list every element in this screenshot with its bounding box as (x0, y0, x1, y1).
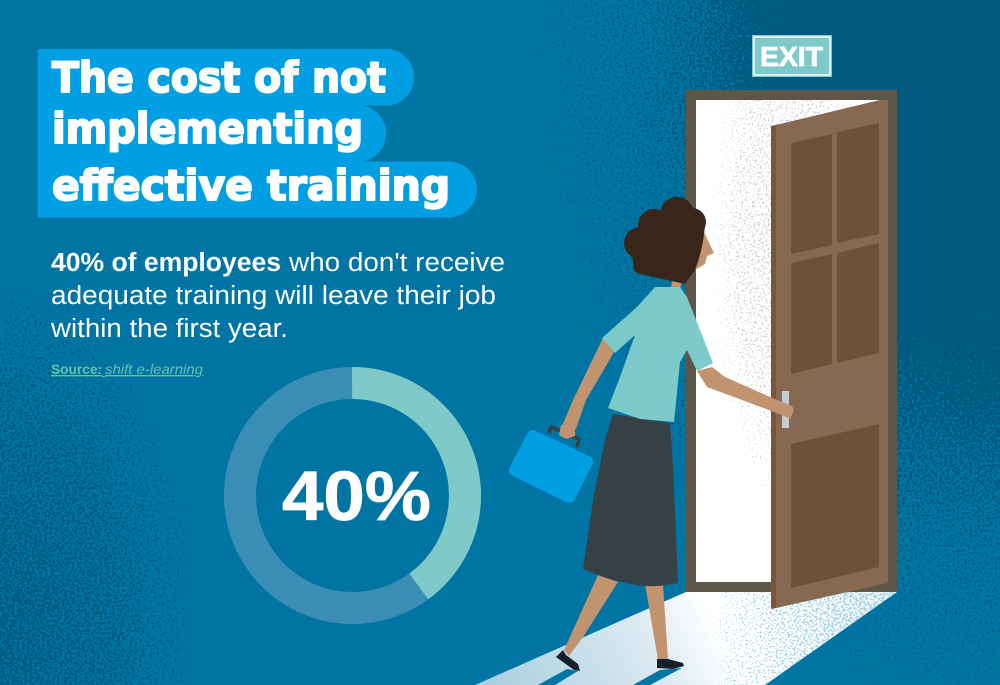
open door (771, 100, 888, 609)
source link: shift e-learning (105, 362, 204, 377)
source link: Source: (51, 362, 102, 377)
briefcase (509, 427, 593, 503)
hand on briefcase (559, 425, 575, 439)
hair (624, 197, 706, 284)
legs (564, 575, 618, 656)
exit sign (752, 35, 832, 77)
description text (50, 249, 505, 343)
description text: 40% of employees (51, 249, 281, 277)
front arm (697, 367, 794, 419)
description text: within the first year. (50, 315, 288, 343)
neck and face (671, 280, 682, 290)
description text: adequate training will leave their job (51, 282, 496, 310)
donut value: 40% (282, 457, 431, 535)
skirt (583, 414, 678, 586)
woman walking through door (509, 197, 794, 671)
title text: effective training (52, 161, 450, 210)
description text: who don't receive (288, 249, 505, 277)
donut remainder (240, 383, 465, 608)
floor light (475, 590, 900, 685)
title text: implementing (52, 104, 363, 153)
door frame and open doorway (686, 90, 897, 592)
title text (52, 53, 450, 210)
donut chart: 40% (240, 383, 465, 608)
back arm (562, 338, 615, 429)
title (38, 49, 477, 218)
donut 40% segment (240, 383, 465, 608)
title text: The cost of not (52, 53, 386, 102)
title highlight bars (38, 49, 477, 218)
shoes (556, 650, 580, 671)
shirt (602, 287, 713, 422)
source link (51, 362, 204, 377)
exit sign: EXIT (760, 41, 823, 72)
leg shadows (538, 669, 578, 685)
door handle (782, 391, 789, 428)
